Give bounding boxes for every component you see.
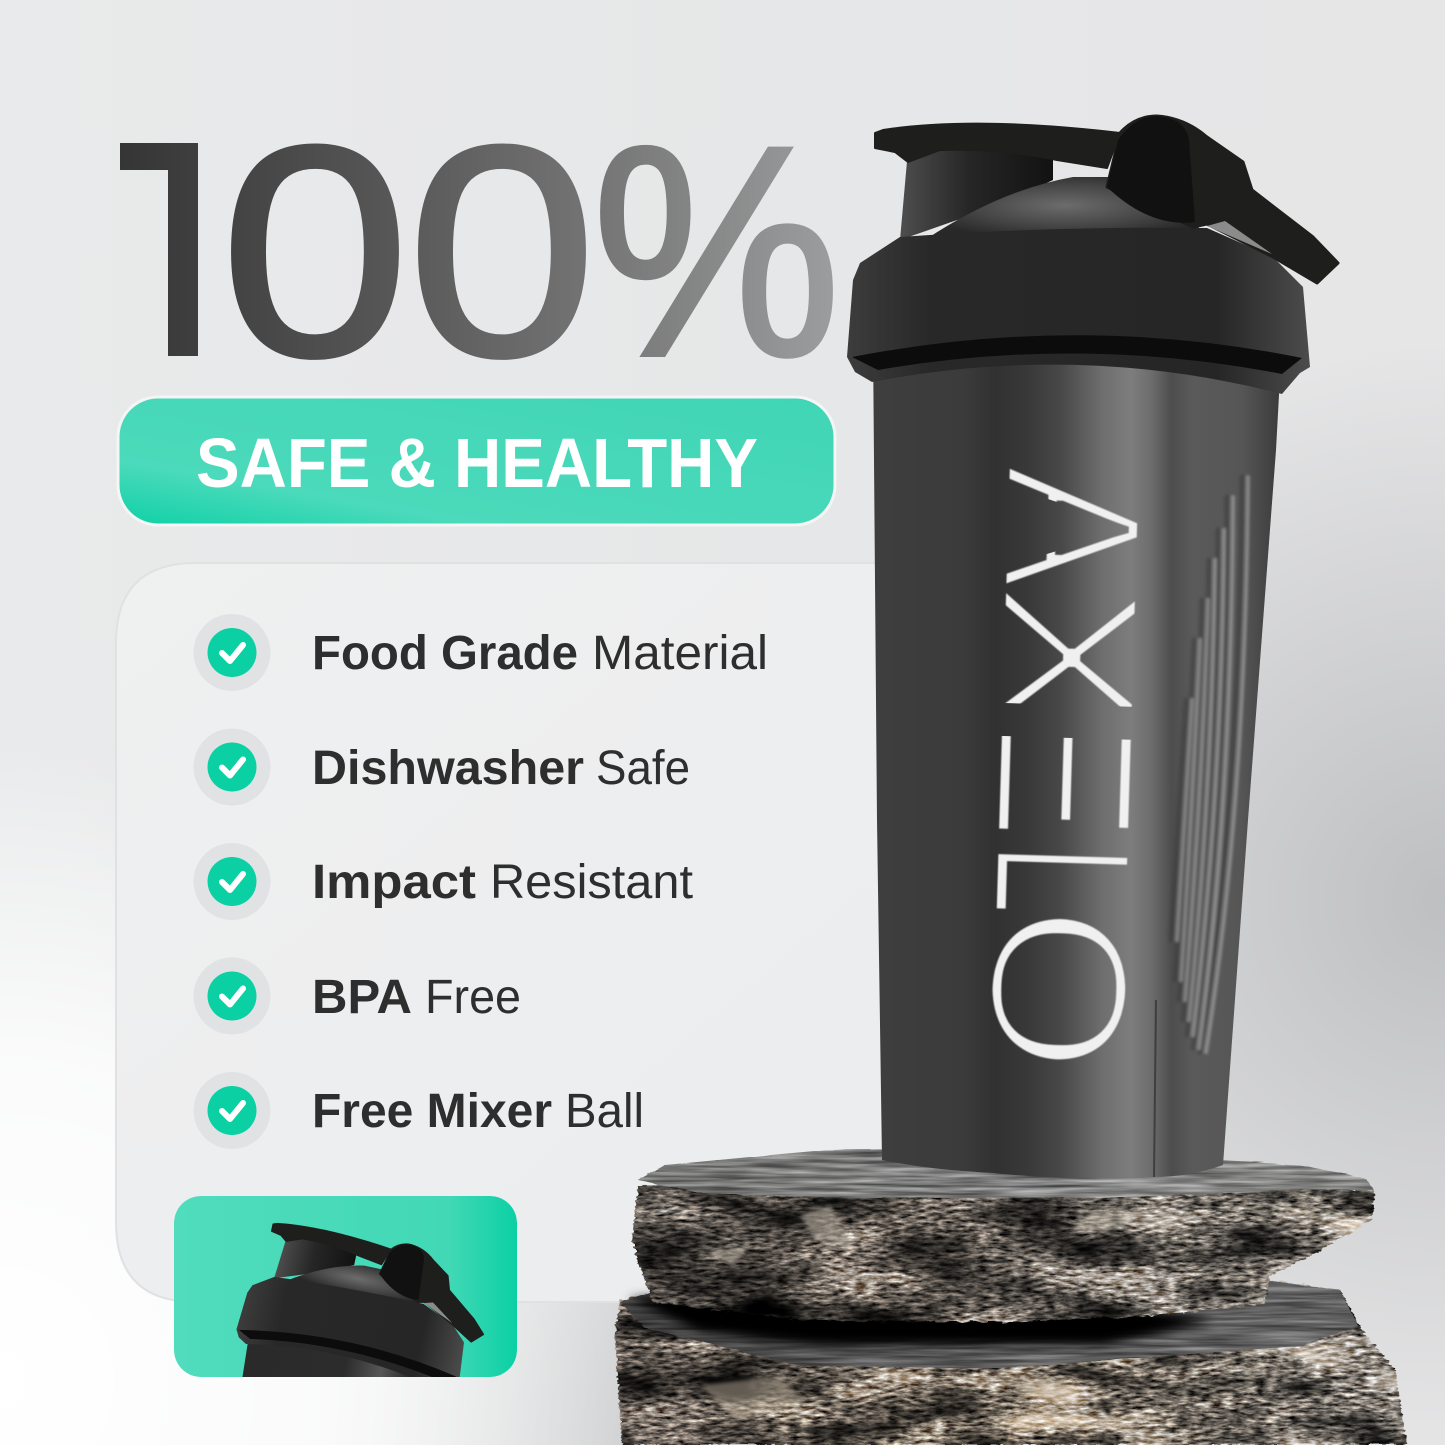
bottle body xyxy=(873,340,1282,1179)
feature: dishwasher safe: Dishwasher xyxy=(312,742,584,795)
feature: impact resistant: Resistant xyxy=(490,856,693,909)
feature: food grade material: Material xyxy=(592,627,768,680)
feature: food grade material xyxy=(194,614,768,691)
thumbnail: shaker lid close-up xyxy=(174,1196,517,1377)
feature: bpa free xyxy=(194,958,521,1034)
lower rock xyxy=(615,1280,1407,1445)
feature: food grade material: Food Grade xyxy=(312,627,578,680)
panel: feature list xyxy=(116,563,1000,1302)
headline: 100%: 0 xyxy=(407,83,597,419)
logo: AXELO: L xyxy=(952,839,1173,921)
logo: AXELO: A xyxy=(961,462,1184,594)
logo: AXELO: O xyxy=(947,903,1171,1076)
bottle crease xyxy=(1154,1000,1156,1177)
shaker bottle xyxy=(847,116,1338,1179)
headline: 100%: % xyxy=(592,83,841,419)
logo: AXELO: E xyxy=(954,694,1177,846)
feature: free mixer ball: Free Mixer xyxy=(312,1085,552,1138)
logo: AXELO: X xyxy=(957,579,1180,735)
headline: 100%: 1 xyxy=(96,84,263,420)
feature: free mixer ball xyxy=(194,1072,644,1149)
feature: dishwasher safe: Safe xyxy=(596,742,690,795)
headline: 100%: 0 xyxy=(220,83,410,419)
feature: free mixer ball: Ball xyxy=(565,1085,644,1138)
feature: impact resistant xyxy=(194,843,693,920)
banner: safe and healthy xyxy=(118,397,835,525)
bottle lid xyxy=(847,116,1338,394)
upper rock xyxy=(632,1148,1375,1322)
banner: safe and healthy: SAFE & HEALTHY xyxy=(196,424,758,502)
feature: bpa free: BPA xyxy=(312,971,412,1024)
logo: AXELO xyxy=(992,468,1138,1060)
grip ribs xyxy=(1171,477,1248,1052)
feature: bpa free: Free xyxy=(425,971,521,1024)
headline: 100% xyxy=(120,143,833,360)
feature: dishwasher safe xyxy=(194,728,690,806)
feature: impact resistant: Impact xyxy=(312,856,476,909)
